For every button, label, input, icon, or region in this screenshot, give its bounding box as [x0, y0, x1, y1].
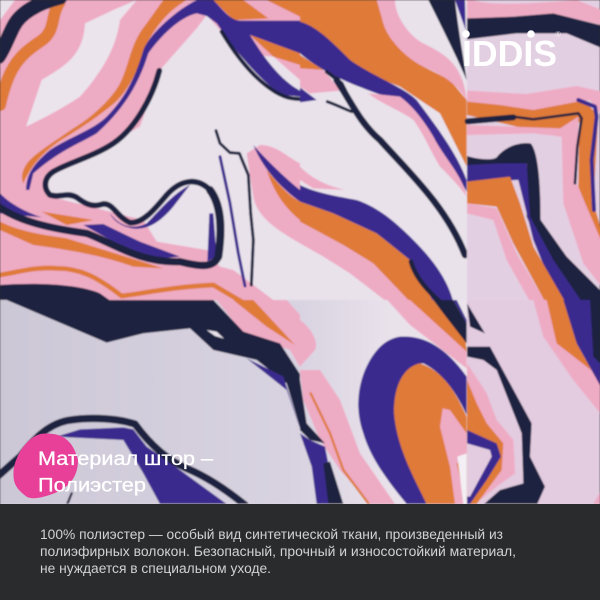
logo: IDDIS: ® [556, 30, 562, 38]
pink accent blob [13, 433, 78, 498]
title second line: Полиэстер [38, 476, 146, 496]
description text: 100% полиэстер — особый вид синтетической ткани, произведенный из [40, 527, 503, 542]
description text [40, 527, 516, 576]
bottom description panel [0, 504, 600, 600]
logo: IDDIS: IDDIS [462, 33, 557, 74]
fabric: top-left quadrant [0, 0, 302, 302]
title: Материал штор – [38, 449, 213, 470]
fabric: bottom-right quadrant [300, 300, 600, 504]
fabric: top-right quadrant [300, 0, 467, 302]
description text: полиэфирных волокон. Безопасный, прочный и износостойкий материал, [40, 544, 516, 559]
fabric: right curtain panel upper [467, 0, 600, 302]
description text: не нуждается в специальном уходе. [40, 561, 271, 576]
icon: stitched branch line [216, 131, 253, 286]
fabric: bottom-left quadrant [0, 300, 302, 505]
